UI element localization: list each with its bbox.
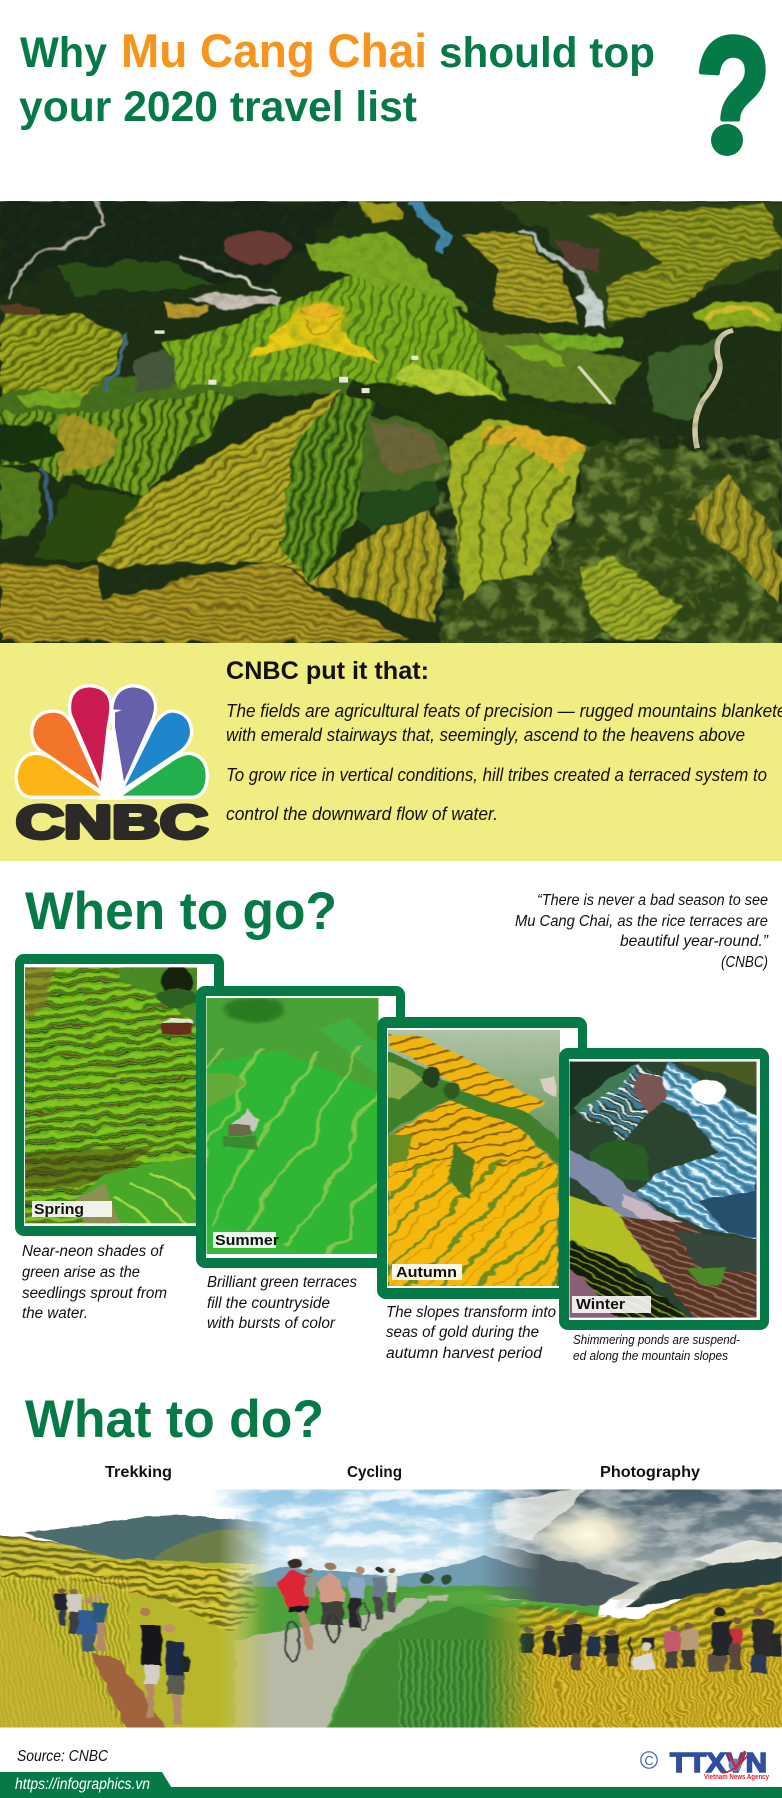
caption: Spring: the water. xyxy=(22,1305,88,1322)
caption: Autumn: The slopes transform into xyxy=(386,1304,556,1321)
title: your 2020 travel list xyxy=(19,83,417,131)
logo: copyright TTXVN: Vietnam News Agency xyxy=(704,1772,770,1781)
activity labels xyxy=(105,1464,700,1481)
title: Mu Cang Chai xyxy=(121,24,427,77)
source: Source: CNBC xyxy=(17,1748,108,1765)
label: Spring: Spring xyxy=(34,1201,84,1218)
card: Spring xyxy=(0,954,224,1236)
caption: Spring xyxy=(22,1243,167,1322)
people: trekkers xyxy=(55,1588,191,1725)
card: Autumn xyxy=(377,1017,587,1299)
scene: cycling (middle) xyxy=(214,1490,600,1728)
card: Summer xyxy=(196,986,405,1268)
quote: never a bad season: beautiful year-round.” xyxy=(620,933,769,950)
footer bar with url: https://infographics.vn xyxy=(15,1776,150,1793)
logo: CNBC peacock: CNBC xyxy=(16,796,208,848)
scene: photography (right) xyxy=(484,1490,782,1728)
card: Winter xyxy=(559,1048,769,1330)
heading: CNBC put it that: CNBC put it that: xyxy=(226,657,429,685)
logo: copyright TTXVN: C xyxy=(644,1753,654,1768)
title xyxy=(19,24,655,131)
caption: Summer: fill the countryside xyxy=(207,1295,330,1312)
caption: Autumn: autumn harvest period xyxy=(386,1345,543,1362)
caption: Winter: Shimmering ponds are suspend- xyxy=(573,1333,740,1347)
logo: copyright TTXVN xyxy=(641,1747,770,1781)
caption: Summer: with bursts of color xyxy=(207,1315,336,1332)
caption: Autumn xyxy=(386,1304,556,1362)
label: Summer: Summer xyxy=(215,1232,279,1249)
caption: Spring: Near-neon shades of xyxy=(22,1243,165,1260)
activity labels: Photography xyxy=(600,1464,700,1481)
caption: Spring: seedlings sprout from xyxy=(22,1285,167,1302)
caption: Winter: ed along the mountain slopes xyxy=(573,1349,728,1363)
caption: Autumn: seas of gold during the xyxy=(386,1324,539,1341)
title: should top xyxy=(439,29,655,77)
label: Autumn: Autumn xyxy=(396,1264,457,1281)
quote: never a bad season: (CNBC) xyxy=(721,954,768,971)
footer bar with url xyxy=(0,1772,782,1798)
quote text: control the downward flow of water. xyxy=(226,804,498,824)
logo: copyright TTXVN: TTXVN xyxy=(670,1747,767,1778)
band background xyxy=(0,643,782,861)
caption: Winter xyxy=(573,1333,740,1363)
caption: Summer xyxy=(207,1274,357,1332)
heading: When to go: When to go? xyxy=(25,882,337,941)
panorama photo: trekking, cycling, photography xyxy=(0,1483,782,1733)
scene: trekking (left) xyxy=(0,1506,270,1728)
quote text xyxy=(226,701,782,824)
activity labels: Cycling xyxy=(347,1464,402,1481)
quote text: with emerald stairways that, seemingly, ascend to the heavens above xyxy=(226,725,745,745)
panel: CNBC quote xyxy=(0,643,782,861)
quote: never a bad season: Mu Cang Chai, as the rice terraces are xyxy=(515,913,768,930)
label: Winter: Winter xyxy=(576,1296,625,1313)
caption: Spring: green arise as the xyxy=(22,1264,140,1281)
hero photo: rice terraces xyxy=(0,201,782,644)
label: Winter xyxy=(572,1296,651,1313)
people: cyclists xyxy=(277,1558,396,1662)
label: Spring xyxy=(32,1201,112,1218)
people: photographers xyxy=(521,1608,782,1673)
quote: never a bad season xyxy=(515,892,769,971)
activity labels: Trekking xyxy=(105,1464,172,1481)
title: Why xyxy=(20,29,107,77)
heading: What to do: What to do? xyxy=(25,1390,324,1449)
panel: season cards xyxy=(0,954,769,1363)
caption: Summer: Brilliant green terraces xyxy=(207,1274,357,1291)
logo: CNBC peacock xyxy=(16,687,208,848)
